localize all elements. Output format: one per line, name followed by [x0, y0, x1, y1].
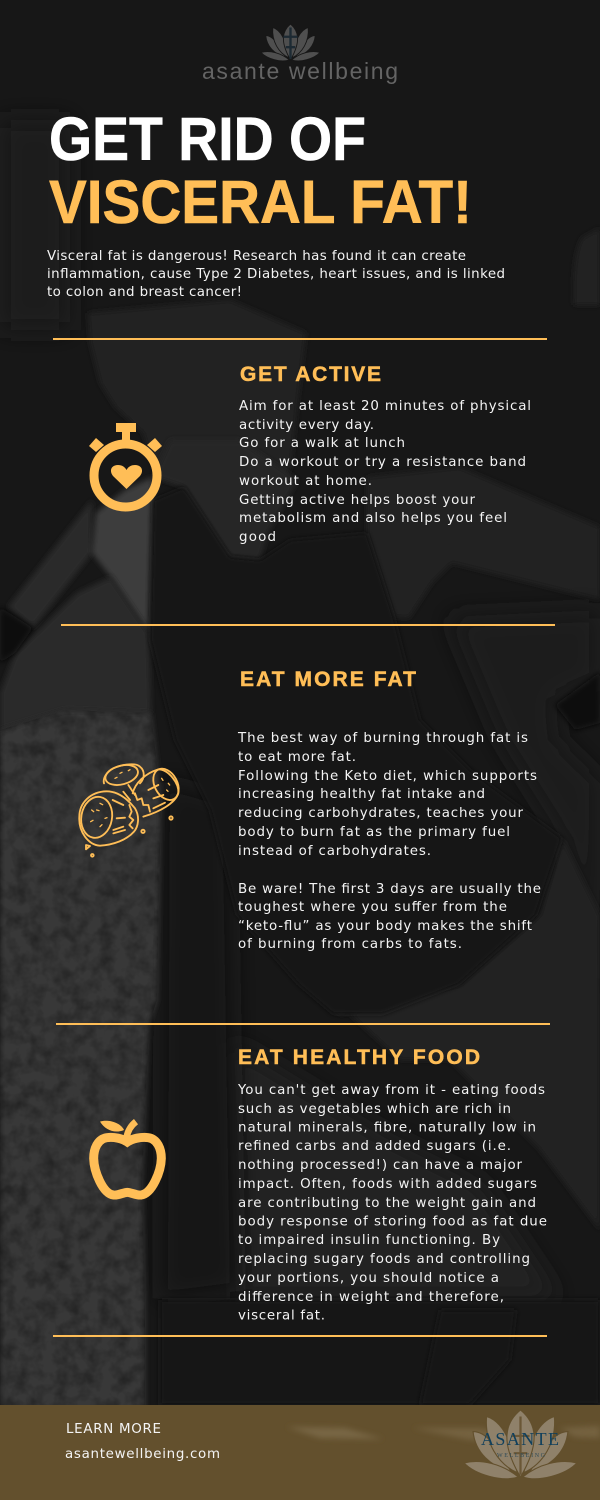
body text: Be ware! The first 3 days are usually the	[238, 882, 541, 897]
body text: “keto-flu” as your body makes the shift	[238, 919, 532, 934]
logo wordmark: asante wellbeing	[202, 58, 398, 84]
body text: to impaired insulin functioning. By	[238, 1233, 500, 1248]
body text: instead of carbohydrates.	[238, 844, 431, 859]
body text: The best way of burning through fat is	[237, 731, 528, 746]
body text	[239, 399, 531, 545]
heading: EAT MORE FAT	[240, 668, 416, 691]
body text: visceral fat.	[238, 1308, 325, 1324]
icon: stopwatch with heart	[89, 423, 162, 507]
body text: You can't get away from it - eating foods	[237, 1083, 545, 1098]
divider	[56, 1023, 550, 1025]
icon: lotus	[464, 1410, 577, 1479]
body text: such as vegetables which are rich in	[238, 1102, 511, 1117]
body text: good	[239, 530, 276, 545]
body text: difference in weight and therefore,	[238, 1290, 504, 1305]
body text: body response of storing food as fat due	[238, 1214, 547, 1230]
panel: get active	[89, 363, 531, 545]
intro paragraph	[47, 249, 505, 300]
body text: your portions, you should notice a	[238, 1271, 499, 1286]
intro paragraph: Visceral fat is dangerous! Research has found it can create	[47, 249, 466, 264]
body text: toughest where you suffer from the	[238, 900, 507, 915]
body text: body to burn fat as the primary fuel	[238, 825, 510, 840]
body text: nothing processed!) can have a major	[238, 1158, 522, 1173]
learn more label: LEARN MORE	[66, 1422, 161, 1437]
body text: metabolism and also helps you feel	[239, 511, 507, 526]
footer band	[0, 1405, 600, 1500]
body text: replacing sugary foods and controlling	[238, 1252, 530, 1267]
title: VISCERAL FAT!	[49, 168, 472, 236]
body text: of burning from carbs to fats.	[238, 937, 462, 952]
body text: reducing carbohydrates, teaches your	[238, 806, 523, 821]
body text: activity every day.	[239, 418, 374, 433]
body text: natural minerals, fibre, naturally low in	[238, 1120, 536, 1136]
body text: refined carbs and added sugars (i.e.	[238, 1139, 511, 1154]
body text	[237, 731, 541, 952]
body text: Aim for at least 20 minutes of physical	[239, 399, 531, 414]
icon: lotus	[261, 24, 320, 61]
logo: asante wellbeing	[202, 24, 398, 84]
icon: nuts	[78, 762, 184, 857]
body text: workout at home.	[239, 474, 372, 489]
heading: GET ACTIVE	[240, 363, 381, 386]
wordmark: ASANTE	[481, 1429, 559, 1449]
divider	[53, 338, 547, 340]
title: GET RID OF	[49, 105, 366, 173]
intro paragraph: inflammation, cause Type 2 Diabetes, heart issues, and is linked	[47, 267, 505, 282]
body text: Go for a walk at lunch	[239, 436, 405, 451]
icon: apple	[94, 1121, 161, 1195]
body text: are contributing to the weight gain and	[238, 1196, 536, 1211]
body text: Following the Keto diet, which supports	[238, 769, 537, 784]
panel: eat more fat	[78, 668, 541, 952]
body text: to eat more fat.	[238, 750, 356, 765]
body text: impact. Often, foods with added sugars	[238, 1177, 537, 1192]
divider	[61, 624, 555, 626]
body text: Do a workout or try a resistance band	[239, 455, 526, 470]
panel: eat healthy food	[94, 1046, 547, 1324]
body text: increasing healthy fat intake and	[238, 787, 485, 802]
wordmark sub-line: WELLBEING	[497, 1453, 546, 1459]
title	[49, 105, 472, 236]
divider	[53, 1335, 547, 1337]
intro paragraph: to colon and breast cancer!	[47, 285, 242, 300]
website url: asantewellbeing.com	[65, 1447, 220, 1462]
body text: Getting active helps boost your	[239, 493, 475, 508]
heading: EAT HEALTHY FOOD	[238, 1046, 480, 1069]
body text	[237, 1083, 547, 1324]
footer logo	[464, 1410, 577, 1479]
